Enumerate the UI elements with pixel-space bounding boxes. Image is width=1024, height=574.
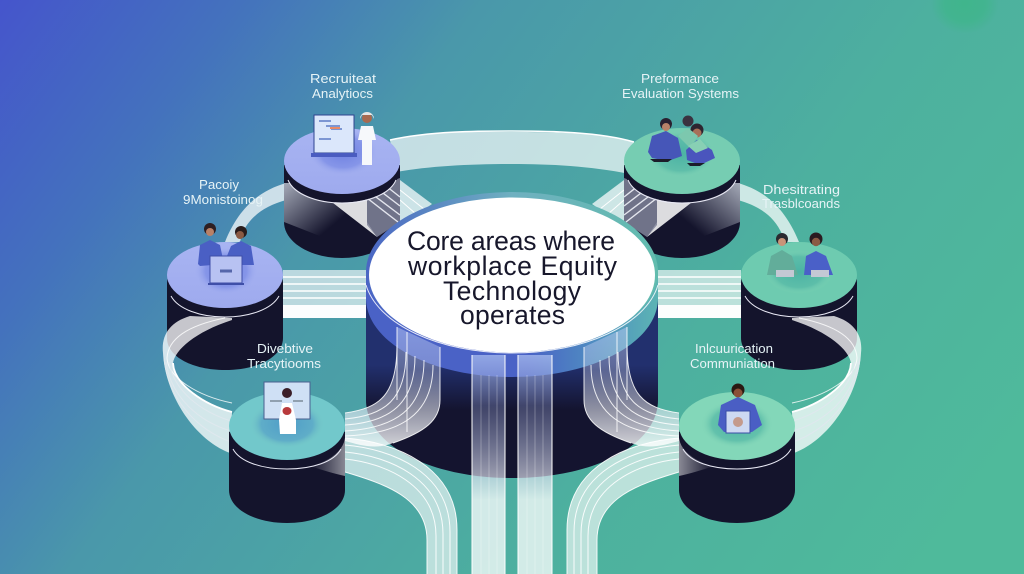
label: recruitment analytics (310, 72, 377, 101)
label: dashboards: Dhesitrating (763, 183, 840, 197)
label: dashboards (762, 183, 840, 211)
icon: dashboards two people (767, 232, 833, 277)
front ribbons: right ring and S-curve (567, 316, 861, 574)
title: Technology (443, 276, 582, 306)
pedestal: inclusive communication (679, 392, 795, 523)
hub: central vertical ribbon strips (472, 355, 552, 574)
label: policy monitoring (183, 178, 263, 207)
label: diverse tracking: Tracytiooms (247, 357, 321, 371)
pedestal: performance evaluation (624, 128, 740, 258)
label: performance evaluation (622, 72, 739, 101)
label: diverse tracking (247, 342, 321, 371)
icon: diverse tracking board and person (264, 382, 310, 434)
icon: inclusive communication person with laptop (718, 384, 762, 433)
label: policy monitoring: 9Monistoinog (183, 193, 263, 207)
label: performance evaluation: Evaluation Systems (622, 87, 739, 101)
icon: recruitment analytics board and person (311, 112, 376, 165)
label: recruitment analytics: Analytiocs (312, 87, 373, 101)
ribbons behind pedestals: left (225, 180, 432, 318)
title: workplace Equity (407, 251, 618, 281)
label: dashboards: Trasblcoands (762, 197, 840, 211)
pedestal: dashboards (741, 242, 857, 370)
title: operates (460, 300, 565, 330)
front ribbons: left ring and S-curve (163, 316, 457, 574)
label: inclusive communication: Inlcuurication (695, 342, 773, 356)
label: performance evaluation: Preformance (641, 72, 719, 86)
label: policy monitoring: Pacoiy (199, 178, 240, 192)
label: inclusive communication: Communiation (690, 357, 775, 371)
icon: performance evaluation seated group (648, 116, 715, 166)
label: diverse tracking: Divebtive (257, 342, 313, 356)
ribbons behind pedestals: right (592, 180, 799, 318)
pedestal: recruitment (284, 128, 400, 258)
label: recruitment analytics: Recruiteat (310, 72, 377, 86)
top ribbon arc connecting the upper pedestals (390, 131, 634, 174)
icon: policy monitoring two people and screen (198, 223, 254, 285)
central hub cylinder (366, 192, 658, 574)
pedestal: diverse tracking (229, 392, 345, 523)
decorative green blob (931, 0, 999, 34)
title (407, 226, 618, 330)
label: inclusive communication (690, 342, 775, 371)
pedestal: policy monitoring (167, 242, 283, 370)
title: Core areas where (407, 226, 615, 256)
